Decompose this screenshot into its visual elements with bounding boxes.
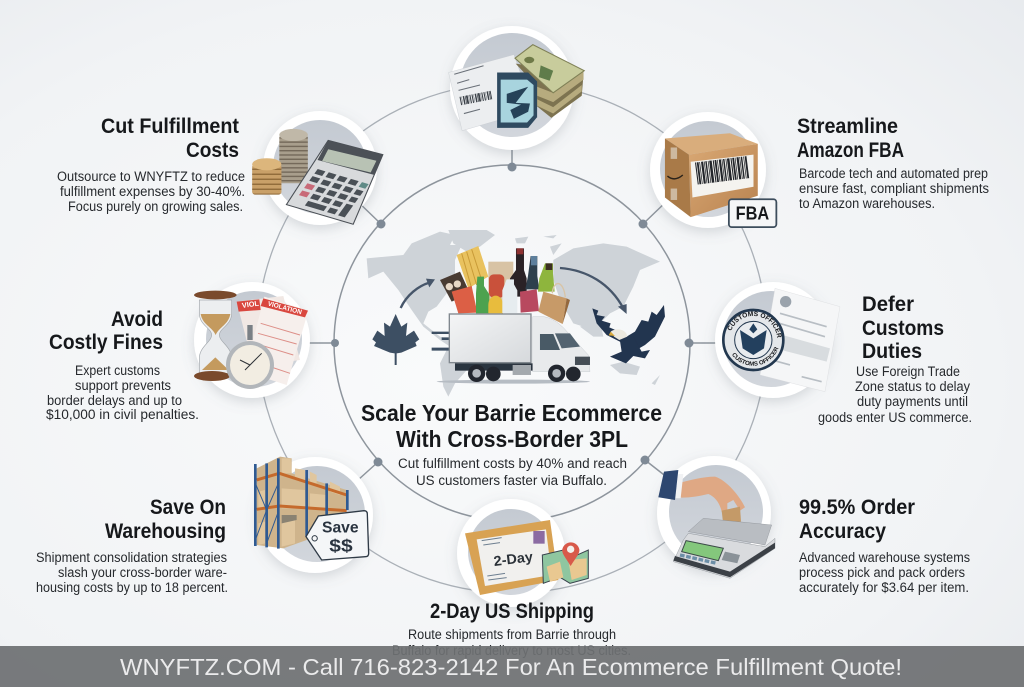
center subtitle xyxy=(398,456,627,488)
text: save on warehousing: Save On xyxy=(150,495,226,519)
panel: 2-day shipping icon xyxy=(457,499,588,607)
footer banner xyxy=(0,646,1024,687)
text: cut fulfillment costs: Focus purely on growing sales. xyxy=(68,199,243,214)
center subtitle: Cut fulfillment costs by 40% and reach xyxy=(398,456,627,471)
text: avoid costly fines: support prevents xyxy=(75,378,171,393)
text: cut fulfillment costs: fulfillment expenses by 30-40%. xyxy=(60,184,245,199)
center title: With Cross-Border 3PL xyxy=(396,426,628,452)
text: avoid costly fines xyxy=(46,307,199,422)
panel: save on warehousing icon xyxy=(255,457,373,573)
violation notices: VIOL xyxy=(241,299,260,310)
bald eagle xyxy=(592,305,665,363)
text: avoid costly fines: $10,000 in civil penalties. xyxy=(46,407,199,422)
panel: defer customs duties icon xyxy=(711,282,840,406)
text: streamline Amazon FBA: Streamline xyxy=(797,114,898,138)
text: 99.5% order accuracy: Advanced warehouse systems xyxy=(799,550,970,565)
text: cut fulfillment costs: Costs xyxy=(186,138,239,162)
text: 2-day US shipping: Route shipments from Barrie through xyxy=(408,627,616,642)
network rings and connectors xyxy=(257,83,767,593)
text: save on warehousing xyxy=(36,495,228,595)
arrowheads xyxy=(426,279,627,314)
text: streamline Amazon FBA: Barcode tech and automated prep xyxy=(799,166,988,181)
FBA badge: FBA xyxy=(736,202,769,223)
text: streamline Amazon FBA xyxy=(797,114,989,211)
text: streamline Amazon FBA: Amazon FBA xyxy=(797,138,904,162)
violation notices: VIOLATION xyxy=(267,301,303,316)
panel: top icon (shipping label, document, cash) xyxy=(449,26,584,150)
envelope: 2-Day xyxy=(493,548,534,569)
customs seal: CUSTOMS OFFICER xyxy=(732,347,778,366)
text: save on warehousing: Warehousing xyxy=(105,519,226,543)
text: 99.5% order accuracy xyxy=(799,495,970,595)
digital scale xyxy=(673,518,775,578)
maple leaf xyxy=(372,314,419,365)
text: streamline Amazon FBA: to Amazon warehouses. xyxy=(799,196,935,211)
text: 2-day US shipping xyxy=(392,599,631,658)
price tag: $$ xyxy=(329,536,353,556)
price tag: Save xyxy=(322,519,359,536)
text: defer customs duties: Customs xyxy=(862,316,944,340)
hand placing box xyxy=(658,470,745,525)
center title: Scale Your Barrie Ecommerce xyxy=(361,400,662,426)
panel: order accuracy icon xyxy=(657,456,775,578)
text: cut fulfillment costs: Cut Fulfillment xyxy=(101,114,239,138)
cardboard box xyxy=(665,133,758,217)
panel: cut fulfillment costs icon xyxy=(252,111,383,225)
delivery truck xyxy=(437,314,590,384)
hourglass xyxy=(194,291,237,381)
text: avoid costly fines: Avoid xyxy=(111,307,163,331)
groceries xyxy=(440,246,570,324)
text: avoid costly fines: Costly Fines xyxy=(49,330,163,354)
text: save on warehousing: housing costs by up to 18 percent. xyxy=(36,580,228,595)
text: defer customs duties: Zone status to delay xyxy=(855,379,970,394)
world map xyxy=(367,230,660,397)
text: streamline Amazon FBA: ensure fast, compliant shipments xyxy=(799,181,989,196)
panel: streamline Amazon FBA icon xyxy=(650,112,776,228)
curved arrow: Canada to truck xyxy=(401,268,623,308)
text: save on warehousing: Shipment consolidation strategies xyxy=(36,550,227,565)
cash stack xyxy=(515,45,584,118)
price tag xyxy=(306,511,369,560)
text: defer customs duties: Use Foreign Trade xyxy=(856,364,960,379)
text: defer customs duties: Duties xyxy=(862,339,922,363)
text: 99.5% order accuracy: 99.5% Order xyxy=(799,495,916,519)
customs seal xyxy=(722,308,785,372)
text: 99.5% order accuracy: accurately for $3.64 per item. xyxy=(799,580,969,595)
panel: avoid costly fines icon xyxy=(194,282,310,398)
center subtitle: US customers faster via Buffalo. xyxy=(416,473,607,488)
center title xyxy=(361,400,662,452)
text: defer customs duties: duty payments until xyxy=(857,394,968,409)
customs seal: CUSTOMS OFFICER xyxy=(728,311,782,338)
text: defer customs duties: Defer xyxy=(862,292,915,316)
coin stacks xyxy=(252,129,308,195)
central illustration: map, truck, maple leaf, eagle xyxy=(367,230,665,397)
text: 2-day US shipping: 2-Day US Shipping xyxy=(430,599,594,623)
text: avoid costly fines: Expert customs xyxy=(75,363,160,378)
text: defer customs duties: goods enter US commerce. xyxy=(818,410,972,425)
text: cut fulfillment costs xyxy=(57,114,245,214)
calculator xyxy=(286,140,383,224)
teal document xyxy=(497,72,537,128)
text: cut fulfillment costs: Outsource to WNYFTZ to reduce xyxy=(57,169,245,184)
text: 99.5% order accuracy: Accuracy xyxy=(799,519,886,543)
text: save on warehousing: slash your cross-border ware- xyxy=(58,565,227,580)
shipping label xyxy=(449,55,534,131)
speed arrows xyxy=(432,327,478,354)
footer banner: WNYFTZ.COM - Call 716-823-2142 For An Ecommerce Fulfillment Quote! xyxy=(120,654,902,680)
stopwatch xyxy=(226,325,274,389)
customs document xyxy=(760,288,840,392)
warehouse racking xyxy=(255,457,347,549)
text: defer customs duties xyxy=(818,292,972,425)
map with pin xyxy=(542,542,588,583)
text: avoid costly fines: border delays and up to xyxy=(47,393,182,408)
text: 2-day US shipping: Buffalo for rapid delivery to most US cities. xyxy=(392,643,631,658)
violation notices xyxy=(237,296,308,385)
text: 99.5% order accuracy: process pick and pack orders xyxy=(799,565,965,580)
